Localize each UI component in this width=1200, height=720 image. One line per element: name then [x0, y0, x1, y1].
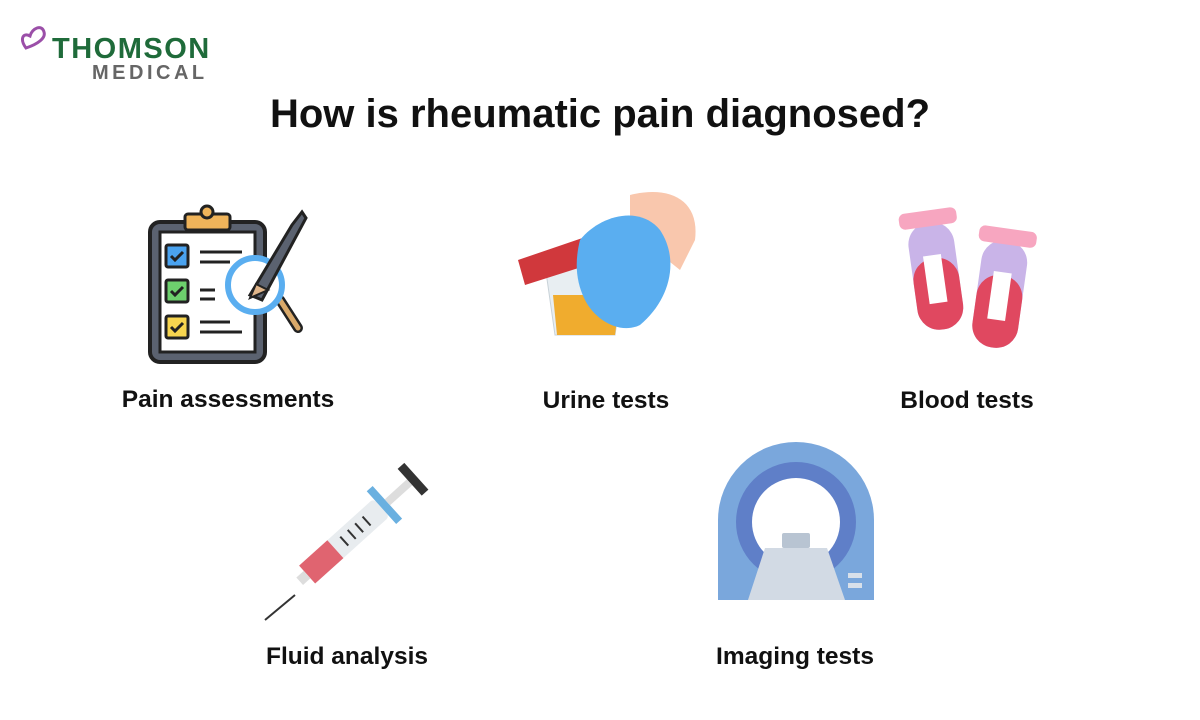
label: pain assessments: Pain assessments — [122, 386, 334, 413]
icon: blood tubes — [898, 207, 1037, 348]
icon: urine cup — [518, 192, 696, 336]
label: fluid analysis: Fluid analysis — [266, 643, 428, 670]
logo: THOMSON — [52, 33, 211, 65]
icon: clipboard — [148, 204, 308, 364]
label: imaging tests: Imaging tests — [716, 643, 874, 670]
icon: MRI scanner — [718, 442, 874, 600]
icon: syringe — [264, 462, 428, 621]
label: blood tests: Blood tests — [900, 387, 1034, 414]
logo — [20, 26, 211, 84]
label: urine tests: Urine tests — [543, 387, 669, 414]
title: How is rheumatic pain diagnosed? — [270, 92, 930, 136]
logo: MEDICAL — [92, 62, 208, 84]
